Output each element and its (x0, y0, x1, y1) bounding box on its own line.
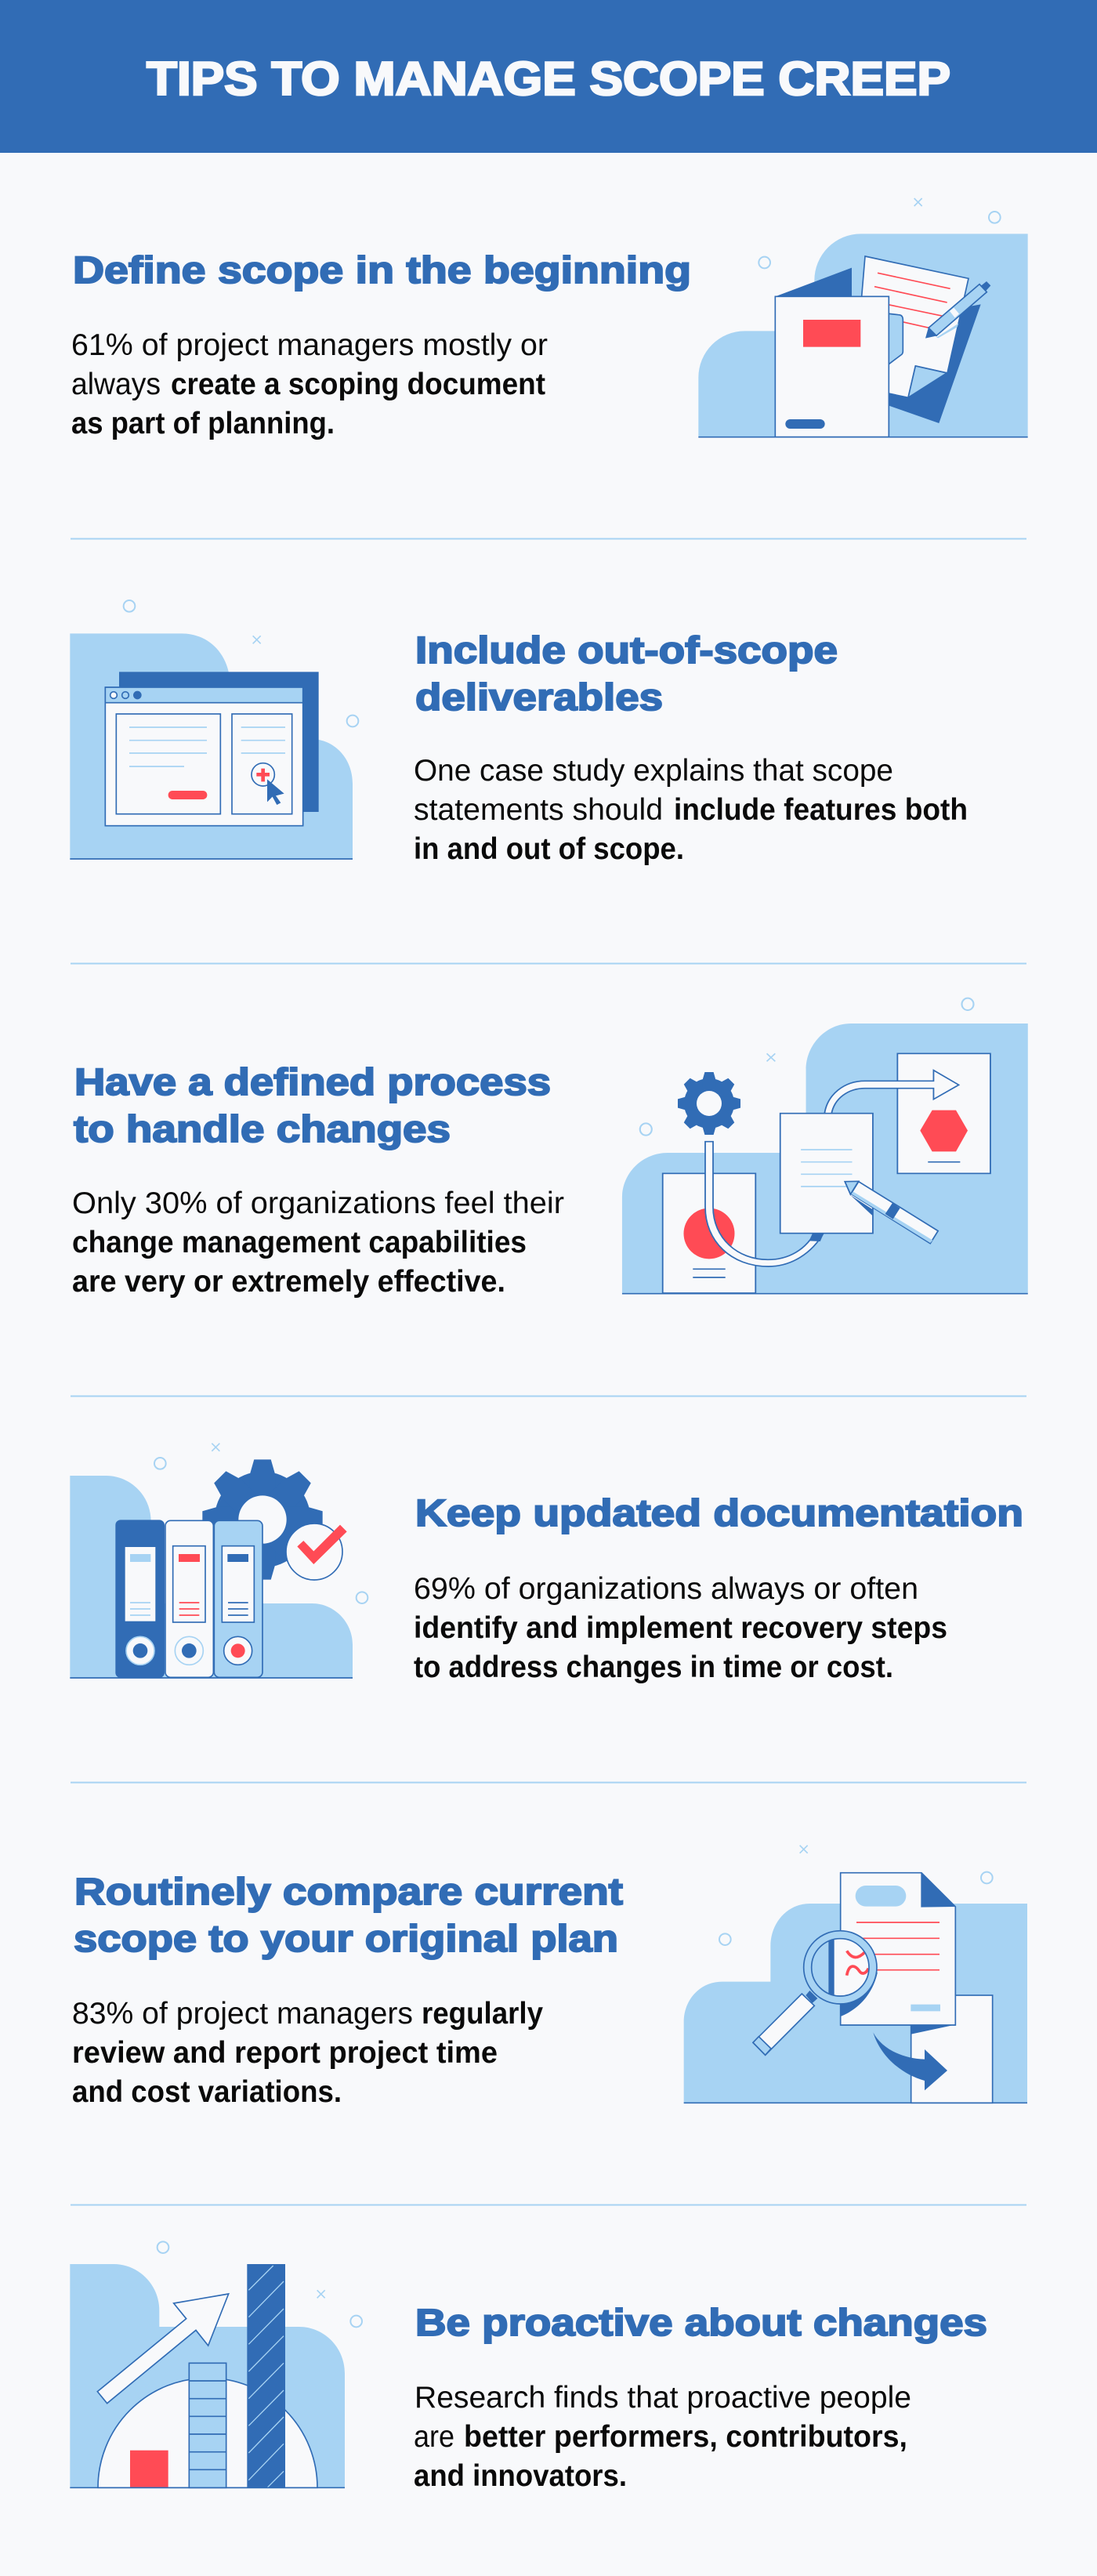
icon: growth chart with arrow (70, 2241, 362, 2487)
text block: updated documentation: 69% of organizations always or often (414, 1572, 918, 1606)
icon: binders with gear and check mark (70, 1444, 367, 1678)
heading: compare scope: Routinely compare current (74, 1871, 623, 1913)
text block: updated documentation: identify and implement recovery steps (414, 1611, 947, 1645)
text block: define scope: create a scoping document (171, 368, 545, 401)
panel: compare scope (72, 1846, 1027, 2109)
heading: compare scope (74, 1871, 623, 1960)
text block: out-of-scope deliverables: statements should (414, 793, 663, 827)
icon: browser window with cursor (70, 600, 358, 859)
binder: dark (115, 1520, 165, 1678)
text block: compare scope: 83% of project managers (72, 1997, 413, 2031)
text block: define scope: 61% of project managers mostly or (71, 328, 548, 362)
text block: be proactive: and innovators. (414, 2459, 627, 2493)
panel: be proactive (70, 2241, 987, 2493)
heading: defined process: Have a defined process (74, 1062, 551, 1103)
text block: out-of-scope deliverables: in and out of scope. (414, 832, 684, 866)
heading: out-of-scope deliverables: deliverables (415, 677, 663, 719)
text block: out-of-scope deliverables (414, 754, 968, 866)
heading: compare scope: scope to your original plan (74, 1918, 618, 1960)
icon: large gear (202, 1459, 323, 1580)
icon: folder with document and pen (698, 198, 1028, 437)
panel: updated documentation (70, 1444, 1023, 1684)
text block: defined process: change management capabilities (72, 1226, 527, 1259)
text block: updated documentation: to address changes in time or cost. (414, 1650, 893, 1684)
title: TIPS TO MANAGE SCOPE CREEP (147, 53, 950, 105)
panel: defined process (72, 998, 1028, 1299)
heading: updated documentation: Keep updated documentation (415, 1493, 1023, 1534)
text block: define scope: as part of planning. (71, 407, 335, 440)
text block: out-of-scope deliverables: include features both (674, 793, 968, 827)
icon: magnifier over document (684, 1846, 1027, 2103)
text block: compare scope (72, 1997, 544, 2109)
heading: defined process: to handle changes (74, 1109, 451, 1150)
text block: be proactive (414, 2381, 911, 2493)
panel: define scope (71, 198, 1028, 440)
heading: out-of-scope deliverables: Include out-of-scope (415, 630, 838, 672)
header banner (0, 0, 1097, 153)
text block: compare scope: review and report project time (72, 2036, 498, 2070)
icon: process flow with gear and documents (622, 998, 1028, 1294)
heading: be proactive: Be proactive about changes (415, 2302, 987, 2344)
text block: defined process: are very or extremely effective. (72, 1265, 505, 1299)
text block: compare scope: regularly (422, 1997, 544, 2031)
panel: out-of-scope deliverables (70, 600, 968, 866)
heading: define scope: Define scope in the beginning (73, 250, 691, 292)
heading: out-of-scope deliverables (415, 630, 838, 719)
text block: updated documentation (414, 1572, 947, 1684)
binder: light (214, 1520, 262, 1677)
text block: compare scope: and cost variations. (72, 2075, 342, 2109)
text block: be proactive: are (414, 2420, 454, 2454)
text block: defined process (72, 1187, 564, 1299)
text block: out-of-scope deliverables: One case study explains that scope (414, 754, 893, 788)
icon: small gear (678, 1072, 740, 1135)
text block: be proactive: better performers, contributors, (464, 2420, 907, 2454)
text block: define scope: always (71, 368, 161, 401)
text block: define scope (71, 328, 548, 440)
text block: defined process: Only 30% of organizations feel their (72, 1187, 564, 1220)
text block: be proactive: Research finds that proactive people (415, 2381, 911, 2415)
heading: defined process (74, 1062, 551, 1150)
binder: white (165, 1520, 213, 1677)
